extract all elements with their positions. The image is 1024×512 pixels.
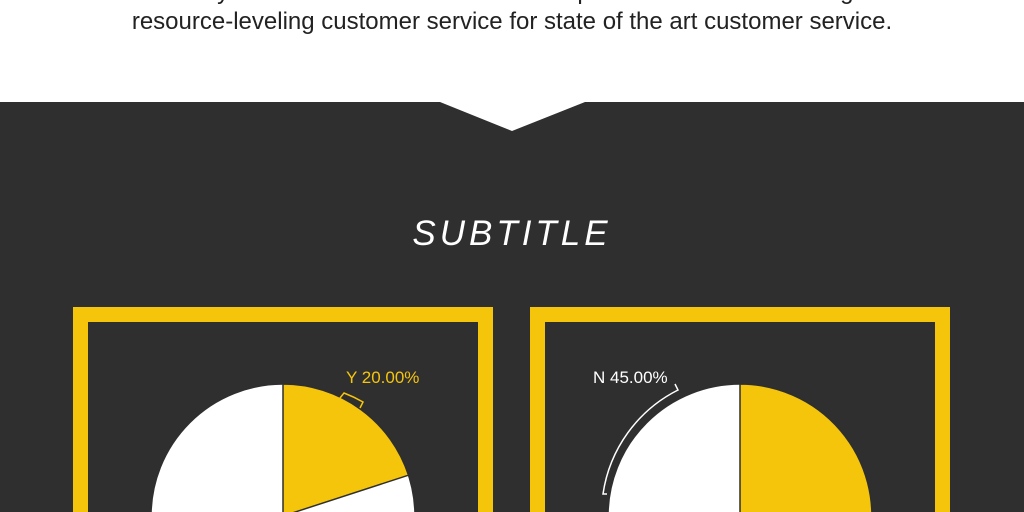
subtitle: SUBTITLE	[412, 214, 612, 253]
panel: right chart	[530, 307, 950, 512]
label: N 45.00%: N 45.00%	[593, 368, 668, 387]
pie: left	[151, 384, 415, 512]
panel: left chart	[73, 307, 493, 512]
label: Y 20.00%	[340, 368, 419, 408]
pie: right	[608, 384, 872, 512]
label: Y 20.00%: Y 20.00%	[346, 368, 419, 387]
label: N 45.00%	[593, 368, 678, 494]
intro text: resource-leveling customer service for state of the art customer service.	[132, 8, 892, 35]
